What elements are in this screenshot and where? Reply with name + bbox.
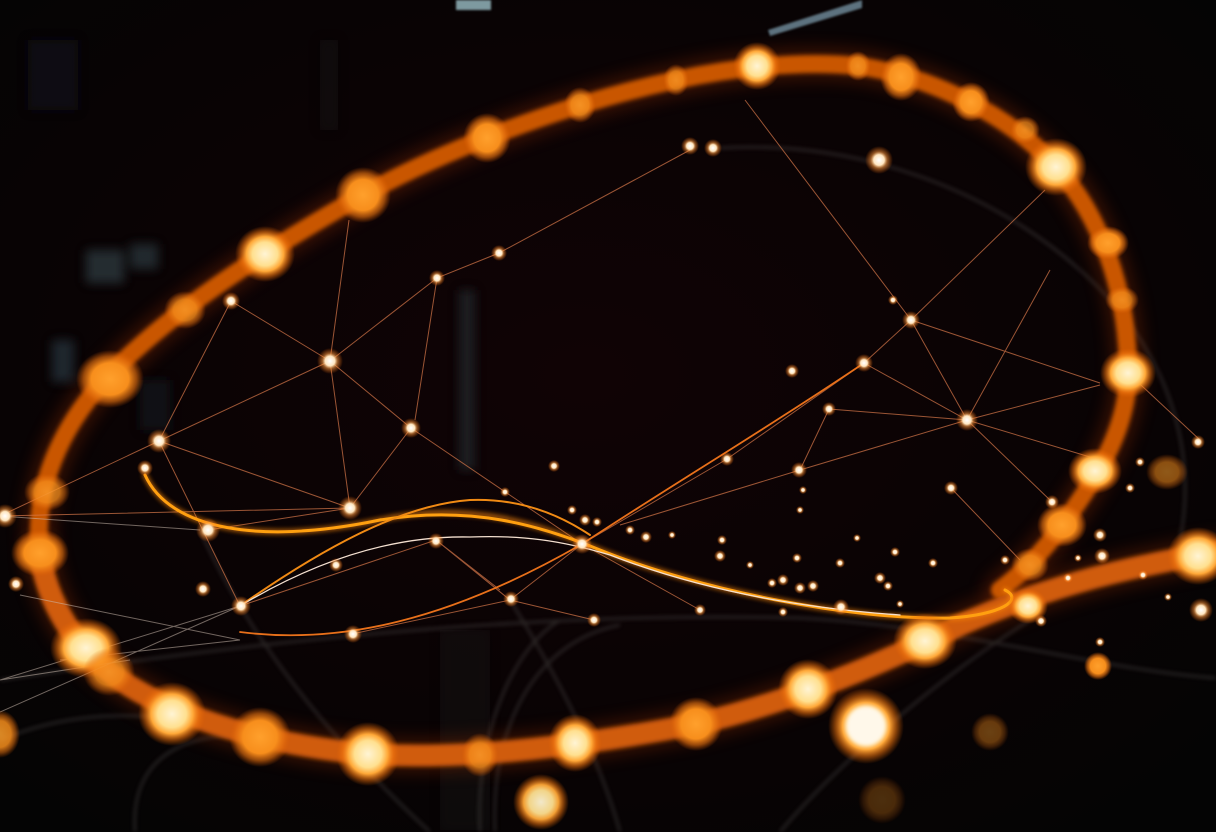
small network nodes — [0, 137, 1213, 647]
orange ring lower band — [40, 552, 1216, 756]
orange flowing curves — [145, 363, 1012, 635]
top light streaks — [456, 0, 862, 36]
thin network lines — [0, 100, 1200, 634]
background window lights — [28, 40, 490, 830]
pale lower-left lines — [0, 516, 240, 712]
spark cluster — [567, 483, 1172, 617]
orange ring upper band — [39, 64, 1128, 590]
